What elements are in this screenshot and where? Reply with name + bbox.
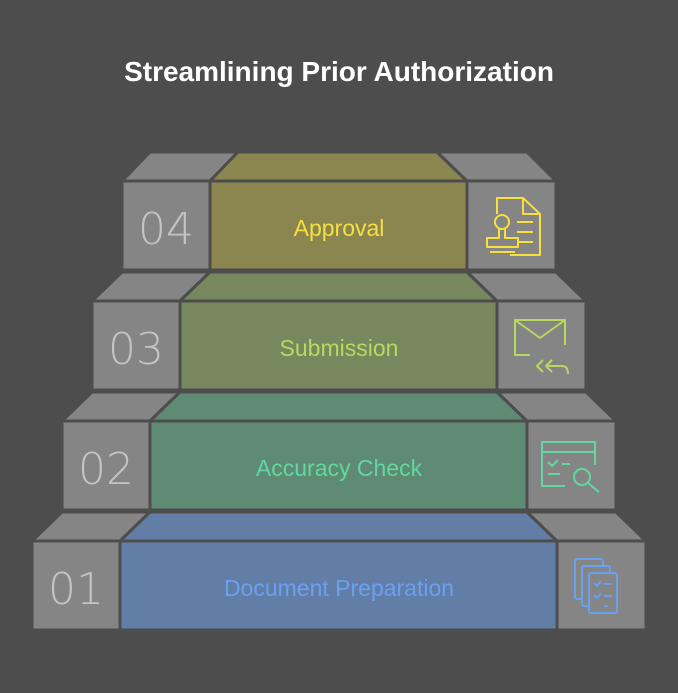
label document preparation: Document Preparation bbox=[224, 575, 454, 601]
title: Streamlining Prior Authorization bbox=[124, 56, 554, 87]
icon: stamp document bbox=[487, 198, 540, 255]
number 03: 03 bbox=[108, 324, 164, 375]
step 1: Document Preparation bbox=[32, 512, 646, 630]
icon: envelope reply bbox=[515, 320, 568, 374]
step 4: Approval bbox=[122, 152, 556, 270]
icon: stacked checklists bbox=[575, 559, 617, 613]
step 2: Accuracy Check bbox=[62, 392, 616, 510]
icon: screen magnifier bbox=[542, 442, 599, 492]
number 02: 02 bbox=[78, 444, 134, 495]
step 3: Submission bbox=[92, 272, 586, 390]
number 04: 04 bbox=[138, 204, 194, 255]
number 01: 01 bbox=[48, 564, 104, 615]
label submission: Submission bbox=[280, 335, 398, 361]
label approval: Approval bbox=[294, 215, 384, 241]
label accuracy check: Accuracy Check bbox=[256, 455, 423, 481]
